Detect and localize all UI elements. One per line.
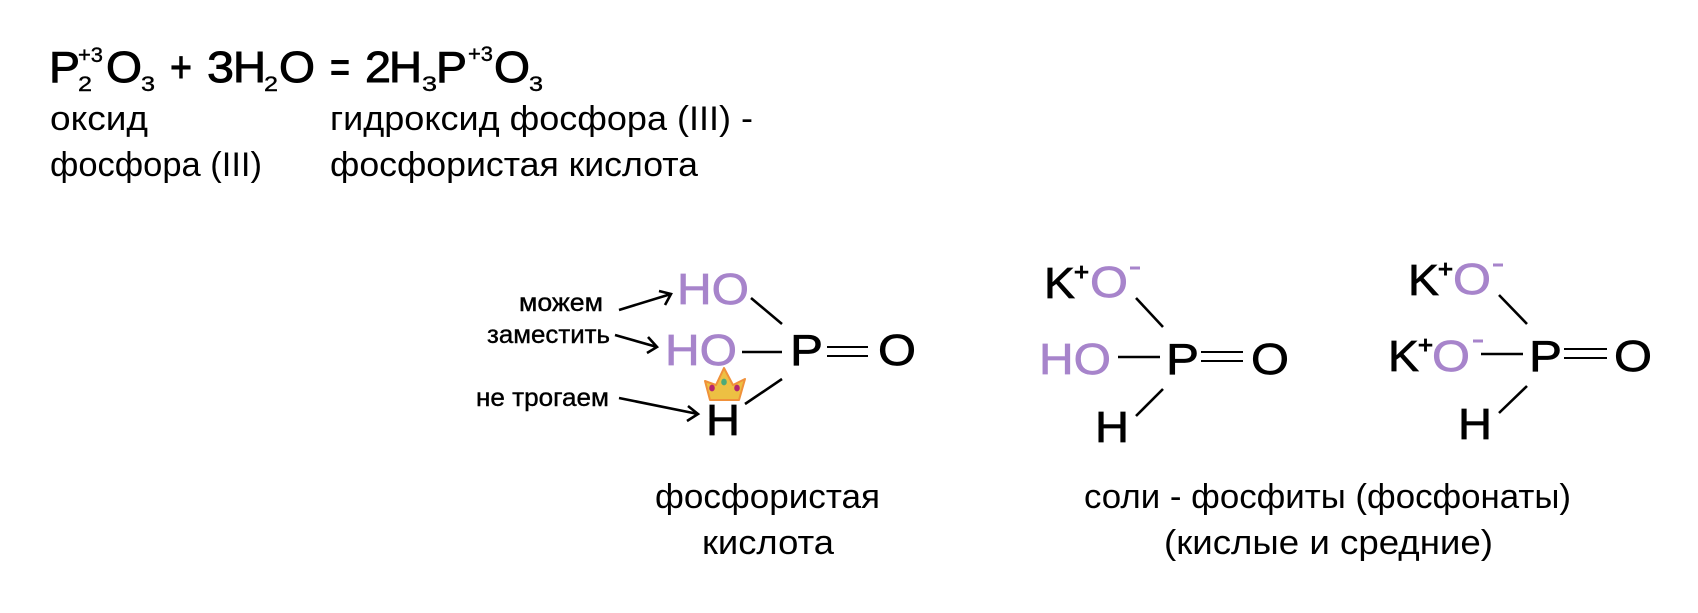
icon: crown xyxy=(705,368,745,400)
label: can be substituted: можем xyxy=(519,289,603,317)
equation: phosphorus(III) oxide plus water: O xyxy=(106,43,142,92)
structure: acid salt: HO xyxy=(1039,335,1111,384)
arrow: to H xyxy=(619,398,698,421)
arrow: to lower HO xyxy=(615,335,657,353)
equation: phosphorus(III) oxide plus water: H xyxy=(389,43,422,92)
structure: phosphorous acid: H xyxy=(706,396,740,445)
structure: acid salt: + xyxy=(1074,259,1089,286)
equation: phosphorus(III) oxide plus water: 3 xyxy=(422,73,437,96)
arrow: to upper HO xyxy=(619,291,671,310)
structure: normal salt: O xyxy=(1432,332,1470,381)
structure: phosphorous acid xyxy=(665,265,916,445)
equation: phosphorus(III) oxide plus water: 2 xyxy=(78,73,92,96)
structure: normal salt xyxy=(1388,255,1652,449)
structure: normal salt: + xyxy=(1418,332,1433,359)
structure: phosphorous acid: HO xyxy=(677,265,749,314)
label: can be substituted: заместить xyxy=(487,321,610,349)
equation: phosphorus(III) oxide plus water: H xyxy=(233,43,266,92)
equation: phosphorus(III) oxide plus water: O xyxy=(279,43,315,92)
structure: normal salt: P xyxy=(1529,332,1562,381)
structure: normal salt: H xyxy=(1458,400,1492,449)
equation: phosphorus(III) oxide plus water: 3 xyxy=(141,73,155,96)
caption: hydroxide name: фосфористая кислота xyxy=(330,146,698,184)
caption: phosphorous acid xyxy=(655,478,880,562)
equation: phosphorus(III) oxide plus water: = xyxy=(330,43,350,92)
equation: phosphorus(III) oxide plus water: + xyxy=(170,43,192,92)
structure: acid salt: K xyxy=(1044,259,1075,308)
label: can be substituted xyxy=(487,289,610,349)
caption: hydroxide name xyxy=(330,100,753,184)
structure: normal salt: K xyxy=(1388,332,1419,381)
equation: phosphorus(III) oxide plus water: P xyxy=(436,43,467,92)
structure: phosphorous acid: O xyxy=(878,326,916,375)
structure: phosphorous acid: P xyxy=(790,326,823,375)
structure: normal salt: O xyxy=(1453,255,1491,304)
structure: normal salt: + xyxy=(1438,256,1453,283)
equation: phosphorus(III) oxide plus water xyxy=(49,43,543,96)
label: do not touch: не трогаем xyxy=(476,384,609,412)
equation: phosphorus(III) oxide plus water: O xyxy=(494,43,530,92)
caption: phosphorous acid: фосфористая xyxy=(655,478,880,516)
structure: acid salt: O xyxy=(1090,258,1128,307)
equation: phosphorus(III) oxide plus water: +3 xyxy=(78,44,103,67)
caption: hydroxide name: гидроксид фосфора (III) - xyxy=(330,100,753,138)
structure: acid salt: O xyxy=(1251,335,1289,384)
equation: phosphorus(III) oxide plus water: P xyxy=(49,43,80,92)
structure: acid salt xyxy=(1039,258,1289,452)
equation: phosphorus(III) oxide plus water: +3 xyxy=(468,43,493,66)
caption: salts xyxy=(1084,478,1571,562)
structure: normal salt: K xyxy=(1408,256,1439,305)
caption: oxide name: оксид xyxy=(50,100,148,138)
structure: normal salt: O xyxy=(1614,332,1652,381)
structure: acid salt: H xyxy=(1095,403,1129,452)
caption: oxide name: фосфора (III) xyxy=(50,146,262,184)
caption: salts: (кислые и средние) xyxy=(1164,524,1493,562)
equation: phosphorus(III) oxide plus water: 3 xyxy=(529,73,543,96)
caption: phosphorous acid: кислота xyxy=(702,524,834,562)
caption: salts: соли - фосфиты (фосфонаты) xyxy=(1084,478,1571,516)
equation: phosphorus(III) oxide plus water: 3 xyxy=(207,43,234,92)
equation: phosphorus(III) oxide plus water: 2 xyxy=(365,43,391,92)
structure: acid salt: P xyxy=(1166,335,1199,384)
equation: phosphorus(III) oxide plus water: 2 xyxy=(264,73,278,96)
caption: oxide name xyxy=(50,100,262,184)
structure: phosphorous acid: HO xyxy=(665,326,737,375)
